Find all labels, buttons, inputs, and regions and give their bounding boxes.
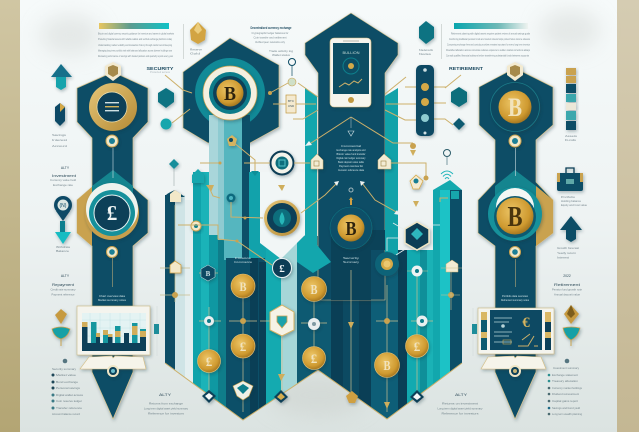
panel: top header center [250,26,293,57]
lower stem captions: Summary [343,260,360,264]
teal strip right of stem [385,88,398,255]
gold pentagon node [227,135,237,146]
caption right [438,393,483,416]
icon: gold leaf gem [55,309,67,324]
gradient bar [454,23,528,29]
paragraph [98,32,174,58]
panel: lower nodes [158,58,467,412]
bullet list: Currency market holdings [552,386,583,390]
right stem line [514,259,516,287]
lower center bitcoin [330,207,372,249]
bullet list: Coin reserve ledger [56,399,82,403]
label: security: SECURITY [146,66,174,72]
caption: Balance [56,249,70,253]
teal gem stem [173,169,175,186]
caption: Funds [565,138,577,142]
gold dots [172,292,454,324]
caption left: Reference for investors [148,412,185,416]
right large bitcoin: B [508,202,522,233]
center text block: Commercial [341,144,362,148]
caption: Interest [52,138,67,142]
center text block [336,144,366,172]
caption block: Currency value held [50,178,76,182]
gold pentagon right center [410,175,423,189]
left shield badge [105,62,121,81]
right large bitcoin [488,187,542,241]
caption [419,48,434,56]
right strip icons [407,191,462,310]
icon: small dot [63,359,67,363]
pentagon home icons on left stripes [170,169,204,273]
left small node [106,135,118,147]
caption: Assets [565,134,578,138]
icon: location pin with down arrow [54,196,72,244]
caption: Equity and trust value [561,203,587,207]
caption: Gold [190,52,201,56]
left open book [80,356,146,377]
caption block: 2022 [563,274,571,278]
vertical stems [175,205,417,412]
caption [190,48,203,56]
coin [302,276,326,302]
center text block: Investor reference data [338,168,365,172]
right open book [481,356,546,377]
left column body [77,72,148,419]
teal connector end [251,171,259,176]
caption block: Repayment [52,283,74,287]
right dashboard [478,308,554,354]
bullet list: Account balance record [52,412,80,416]
icon: location pin with down arrow: (N) [60,203,67,209]
lower center bitcoin: B [346,218,356,240]
divider [182,24,184,59]
right upper bitcoin: B [508,93,522,122]
pound node [272,258,292,278]
bullet list: Dividend reinvestment [552,392,579,396]
bullet list: Treasury allocation [552,379,578,383]
icon: teal leaf gem [563,327,580,346]
caption right: Long term digital asset yield summary [438,406,483,410]
teal ring of upper bitcoin [195,58,265,128]
coin [231,334,255,358]
left-side gem and teal circle [158,88,174,130]
navy hexagon node [201,265,215,281]
icon: gold gem [564,305,579,324]
upper-left hexagon [183,38,279,143]
caption block: ALTY [61,166,70,170]
right stem caption: Retirement summary notes [501,298,530,302]
caption block: Annual deposit value [554,292,580,296]
left column lower hexagon gold flank [77,187,92,246]
right dashboard side tag [472,308,477,356]
navy hexagon node: B [206,270,211,278]
caption block: Retirement [554,283,580,287]
caption: Portfolio [561,195,576,199]
paragraph [446,32,530,58]
panel: right side items [548,68,587,416]
left stem caption: Chart overview data [99,294,126,298]
phone: BULLION [342,50,360,55]
bullet list: Savings and bond yield [552,406,580,410]
right-side gem and diamond [451,87,467,130]
icon: wifi pin [441,150,453,179]
coin: B [384,359,390,374]
paragraph: Reviewing performance of savings with trusted partners and quarterly reports every year [98,54,173,58]
bullet list [52,367,84,416]
right lower node [510,246,520,258]
paragraph: Diversified allocation across currencies reduces exposure to sudden market corrections always [446,48,530,52]
caption [561,195,587,207]
left dashboard bar chart [77,306,150,355]
phone [330,38,371,107]
panel: right column [472,62,554,419]
bullet list: Investment summary [553,366,580,370]
caption [56,245,71,253]
icon: dark hex gem [55,103,65,126]
caption [52,133,67,148]
left pound coin [85,183,139,240]
coin: B [310,283,318,298]
dark hex gem node right center [405,222,429,250]
icon: teal leaf gem [52,327,70,346]
caption: Protected access [150,70,171,74]
paragraph: Wallet status [272,53,291,57]
caption right: Reference for investors [442,412,479,416]
panel: left side items [50,64,84,416]
caption: Growth forecast [557,246,579,250]
divider [440,24,442,59]
left lower node [106,246,118,258]
upper bitcoin [203,66,257,120]
caption: Nodes [419,52,432,56]
paragraph: Comparing exchange fees and custody providers remains important for every long term investor [447,42,530,46]
coin [198,350,220,372]
text box left of phone: USD [288,104,295,108]
teal strip left of stem [297,88,331,273]
caption: Reserve [190,48,203,52]
central stem [305,13,398,300]
right pill [416,65,434,136]
caption: Account [52,144,67,148]
white nodes [204,316,428,330]
teal ring coin [375,252,399,276]
panel: central stripes block [165,13,462,432]
left stem line [112,258,114,287]
caption right: ALTY [455,393,468,397]
gradient bar [99,23,169,29]
bullet list: Personal savings [56,386,81,390]
home icons center [311,154,391,169]
right stem caption [501,294,530,302]
right dashboard: € [522,315,530,331]
paragraph [252,31,293,57]
paragraph: Coin transfer and settlement [254,36,287,40]
gem connectors [387,223,440,255]
icon: briefcase [557,168,583,191]
right shield badge [507,62,523,81]
caption block: Credit rate summary [50,288,76,292]
upper bitcoin: B [224,83,236,105]
caption: Network [419,48,434,52]
bullet list: Transfer reference [56,406,82,410]
paragraph: Cryptographic ledger balances for [252,31,289,35]
pound node: £ [279,263,285,275]
left dashboard side tag [154,306,159,356]
caption: Yearly return [557,251,577,255]
bullet list: Capital gains report [552,399,578,403]
panel: bottom captions [144,393,483,416]
gem [233,381,253,400]
caption left: ALTY [159,393,172,397]
caption block: Payment reference [52,292,75,296]
gold triangles [206,150,419,409]
coin: £ [206,354,213,369]
bullet list: Bond exchange [56,380,78,384]
coin: B [240,279,247,294]
rear left roof [165,190,185,197]
panel: top header left [98,22,206,74]
pin near phone [288,58,296,86]
center text block: Bank deposit notes table [338,160,364,164]
left upper coin [89,83,137,131]
bullet list [548,366,583,416]
icon: gold gem [190,22,206,44]
caption block [50,166,76,187]
icon: navy up arrow [560,216,582,242]
phone connectors [165,75,461,213]
teal node [226,194,236,202]
icon: up arrow [51,64,72,90]
center text block: Exchange rate analysis and [336,148,366,152]
caption block: ALTY [61,274,70,278]
caption block [50,274,76,296]
panel: left column [77,62,159,419]
right lower hexagon gold flank [536,186,553,246]
caption left: Returns from exchange [149,402,184,406]
bullet list: Long term wealth planning [552,412,582,416]
darker lower stem detail [331,230,385,300]
caption: Holding balance [561,199,581,203]
lower stem captions: Finance [235,256,252,260]
coin: £ [240,339,247,354]
icon: color block column [566,68,576,130]
bottom gold edge [165,363,462,420]
teardrop gold coin [264,200,300,236]
heading: Decentralized currency exchange [250,26,292,30]
text box left of phone [286,95,296,113]
lower stem captions: Security [343,256,360,260]
paragraph: Understanding market volatility and transaction history through careful record keeping [98,43,172,47]
caption block [552,274,582,296]
connector dots [218,162,246,242]
paragraph: Combining traditional pension funds and modern tokens helps protect future income streams [449,37,530,41]
bullet list: Security summary [52,367,77,371]
bottom diamonds [202,390,424,403]
caption [565,134,578,142]
bullet list: Exchange statement [552,373,578,377]
right upper bitcoin [490,82,540,132]
white chevron panel [260,172,305,259]
icon: small dot [565,359,569,363]
gold end dots [268,91,428,180]
coin [406,334,428,358]
right small node [509,135,521,147]
caption block: Pension fund growth note [552,288,582,292]
label: retirement: RETIREMENT [449,66,483,72]
lower stem captions: Commerce [234,260,253,264]
ring node [270,152,294,174]
caption block: Exchange rate [53,183,73,187]
caption block: Investment [52,174,76,178]
caption [557,246,579,260]
paragraph: Protecting financial assets with reliable wallets and verified exchange platforms today [98,37,172,41]
right column body [478,68,553,419]
caption left [144,393,189,416]
small node on left stripes [191,221,201,231]
caption: Interest [557,256,569,260]
small pin and dot on stem [348,117,354,205]
paragraph: Trade activity log [269,49,293,53]
left connector stem [112,148,114,178]
right connector stem [514,148,516,176]
coin: £ [414,339,421,354]
coin: £ [311,351,318,366]
center text block: Payment overview list [339,164,363,168]
right stem caption: Portfolio data overview [502,294,528,298]
teal gem [169,159,179,169]
coin [231,274,255,298]
arrow heads [305,141,400,215]
coin [374,352,400,378]
icon: teal gem [419,21,434,44]
right teal chevron cap [495,170,536,200]
left stem caption: Market summary notes [98,298,127,302]
caption left: Long term digital asset yield summary [144,406,189,410]
horizontal ticks [160,268,433,323]
text box left of phone: BTC [288,99,295,103]
center text block: Digital coin ledger summary [336,156,366,160]
left pound coin: £ [107,201,117,225]
caption: Savings [52,133,67,137]
panel: top header right [419,21,530,72]
left stem caption [98,294,127,302]
paragraph: Retirement planning with digital assets requires patient review of annual savings goals [451,32,530,36]
right roof [433,180,462,190]
left teal chevron cap [92,170,133,200]
lower stem captions [234,256,360,264]
connector lines left [178,142,310,265]
paragraph: Bitcoin and digital currency security guidance for investors and savers in global markets [98,32,174,36]
center text block: Bitcoin value fund transfer [336,152,366,156]
bullet list: Digital wallet access [56,393,84,397]
shield hexagon [270,305,294,336]
paragraph: Verified peer networks only [255,40,286,44]
caption right: Returns on investment [442,402,478,406]
bullet list: Market value [56,373,77,377]
caption: Withdraw [56,245,71,249]
coin [302,346,326,370]
paragraph: Managing long term portfolio risk with balanced allocation across diverse holdings now [98,48,173,52]
stripes [165,115,462,432]
paragraph: Consult qualified financial advisors before transferring substantial funds between accounts [446,54,529,58]
